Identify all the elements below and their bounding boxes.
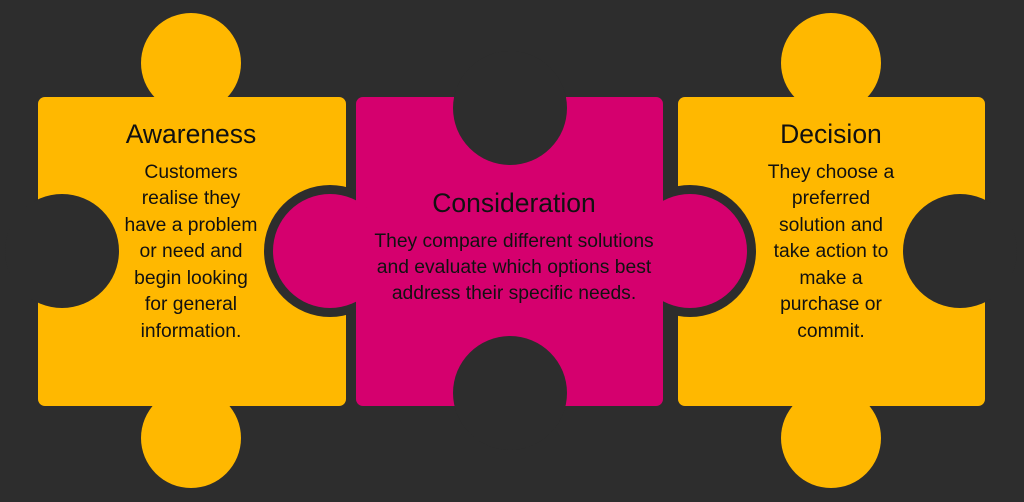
text block: awareness description: begin looking bbox=[134, 268, 248, 289]
text block: awareness description: have a problem bbox=[125, 215, 257, 236]
text block: decision description: make a bbox=[799, 268, 863, 289]
heading: Consideration: Consideration bbox=[432, 188, 596, 218]
text block: decision description: purchase or bbox=[780, 294, 882, 315]
text block: decision description: They choose a bbox=[768, 162, 895, 183]
panel: consideration piece bbox=[273, 51, 747, 450]
text block: awareness description: information. bbox=[141, 321, 241, 342]
text block: awareness description: Customers bbox=[144, 162, 238, 183]
text block: awareness description: or need and bbox=[140, 241, 242, 262]
text block: decision description: preferred bbox=[792, 188, 870, 209]
panel: decision piece bbox=[678, 13, 985, 488]
text block: decision description: commit. bbox=[797, 321, 865, 342]
text block: awareness description: realise they bbox=[142, 188, 241, 209]
heading: Decision: Decision bbox=[780, 119, 882, 149]
text block: awareness description: for general bbox=[145, 294, 237, 315]
panel: awareness piece bbox=[5, 13, 396, 488]
text block: consideration description: address their specific needs. bbox=[392, 283, 636, 304]
text block: consideration description: and evaluate which options best bbox=[377, 257, 652, 278]
text block: decision description: solution and bbox=[779, 215, 883, 236]
heading: Awareness: Awareness bbox=[126, 119, 256, 149]
text block: consideration description: They compare different solutions bbox=[374, 231, 654, 252]
text block: decision description: take action to bbox=[774, 241, 888, 262]
